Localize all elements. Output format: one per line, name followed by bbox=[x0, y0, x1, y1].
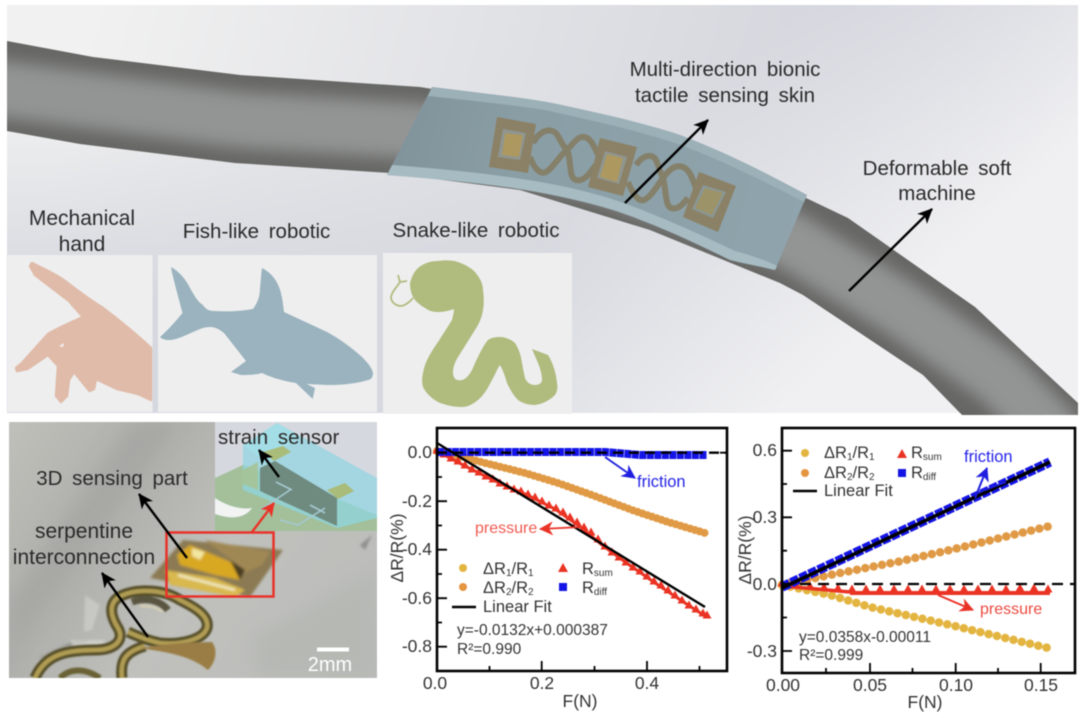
x axis title: F(N) bbox=[908, 692, 942, 712]
linear fit bbox=[782, 462, 1050, 588]
fit equation: y=0.0358x-0.00011 bbox=[799, 629, 931, 646]
arrow: pressure bbox=[938, 595, 973, 610]
annotation: friction: friction bbox=[637, 473, 686, 491]
linear fit bbox=[437, 443, 705, 607]
x tick labels: 0.15 bbox=[1024, 675, 1058, 695]
panel: fish silhouette bbox=[158, 255, 377, 412]
series: R diff squares bbox=[782, 462, 1050, 587]
legend: 2 bbox=[528, 587, 534, 598]
arrow: friction bbox=[605, 457, 635, 478]
arrow: friction bbox=[975, 468, 1006, 498]
label: 3D sensing part: 3D sensing part bbox=[36, 467, 188, 490]
inset: strain sensor CAD bbox=[215, 422, 377, 531]
label: serpentine interconnection: interconnection bbox=[13, 546, 155, 569]
3D sensing chip bbox=[150, 540, 283, 597]
series: delta R1 bbox=[782, 585, 1048, 648]
arrow: pressure bbox=[540, 527, 582, 529]
legend: R bbox=[582, 579, 594, 597]
legend: Linear Fit bbox=[824, 482, 893, 500]
x tick labels: 0.0 bbox=[423, 673, 447, 693]
legend: R bbox=[582, 560, 594, 578]
legend: ΔR bbox=[824, 444, 847, 462]
legend: 2 bbox=[506, 587, 512, 598]
serpentine interconnect in photo bbox=[35, 591, 207, 678]
legend: diff bbox=[594, 587, 607, 598]
panel: device photo bbox=[9, 422, 377, 678]
arrow: 3D sensing part bbox=[139, 494, 187, 558]
label: strain sensor: strain sensor bbox=[218, 426, 340, 449]
legend: 1 bbox=[528, 568, 534, 579]
y tick labels bbox=[402, 442, 432, 656]
x tick labels: 0.00 bbox=[766, 675, 800, 695]
legend: ΔR bbox=[824, 464, 847, 482]
label: mechanical hand: Mechanical bbox=[29, 207, 135, 230]
legend: 2 bbox=[869, 472, 875, 483]
zero reference bbox=[437, 452, 727, 454]
scale bar bbox=[317, 648, 349, 652]
panel: soft machine 3D render bbox=[0, 5, 1080, 440]
label: snake-like robotic: Snake-like robotic bbox=[393, 219, 559, 242]
legend: sum bbox=[923, 452, 942, 463]
series: R diff squares bbox=[437, 452, 707, 455]
series: delta R1 and R2 bbox=[437, 451, 705, 533]
label: sensing skin: Multi-direction bionic bbox=[630, 58, 820, 81]
axes frame and ticks bbox=[437, 428, 727, 671]
legend: R bbox=[911, 464, 923, 482]
x tick labels: 0.4 bbox=[635, 673, 659, 693]
x tick labels: 0.10 bbox=[939, 675, 973, 695]
y tick labels: 0.6 bbox=[753, 440, 777, 460]
y tick labels: -0.2 bbox=[402, 491, 432, 511]
legend: /R bbox=[512, 579, 528, 597]
x tick labels: 0.05 bbox=[853, 675, 887, 695]
sensing skin sleeve bbox=[387, 87, 807, 270]
legend: /R bbox=[852, 464, 869, 482]
series: R sum triangles bbox=[437, 450, 707, 616]
sensor pad 1 bbox=[489, 117, 536, 173]
scale label: 2mm bbox=[308, 654, 352, 676]
y tick labels: -0.3 bbox=[747, 641, 777, 661]
zoom box bbox=[166, 532, 274, 596]
arrow: strain sensor bbox=[259, 450, 279, 477]
y axis title: ΔR/R(%) bbox=[387, 513, 407, 583]
gold bracket in photo bbox=[140, 642, 215, 670]
label: mechanical hand: hand bbox=[59, 233, 105, 256]
annotation: pressure: pressure bbox=[980, 601, 1042, 618]
label: soft machine: Deformable soft bbox=[863, 157, 1011, 180]
y tick labels: -0.8 bbox=[402, 636, 432, 656]
zero reference bbox=[782, 583, 1075, 585]
series: delta R2 bbox=[782, 526, 1050, 585]
annotation: pressure: pressure bbox=[475, 520, 537, 537]
y tick labels bbox=[747, 440, 777, 661]
legend: /R bbox=[852, 444, 869, 462]
legend: 2 bbox=[847, 472, 853, 483]
soft machine tube bbox=[0, 30, 1080, 440]
arrow: serpentine bbox=[102, 573, 148, 637]
legend bbox=[452, 560, 613, 616]
chart: force response, pressure bbox=[387, 428, 727, 711]
y tick labels: 0.0 bbox=[408, 442, 432, 462]
x tick labels bbox=[766, 675, 1058, 695]
x axis title: F(N) bbox=[563, 691, 597, 711]
legend: 1 bbox=[506, 568, 512, 579]
legend: 1 bbox=[847, 452, 853, 463]
legend: /R bbox=[512, 560, 528, 578]
label: soft machine: machine bbox=[898, 182, 976, 205]
sensor pad 3 bbox=[683, 172, 736, 232]
arrow: skin label pointer bbox=[625, 120, 708, 203]
fit equation: R²=0.999 bbox=[799, 647, 863, 664]
panel: snake silhouette bbox=[383, 253, 572, 414]
x tick labels bbox=[423, 673, 659, 693]
legend: sum bbox=[594, 568, 613, 579]
legend: ΔR bbox=[483, 560, 506, 578]
label: serpentine interconnection: serpentine bbox=[35, 520, 133, 543]
fit equation: y=-0.0132x+0.000387 bbox=[457, 622, 608, 639]
panel: hand silhouette bbox=[8, 255, 152, 412]
x tick labels: 0.2 bbox=[530, 673, 554, 693]
arrow: soft machine pointer bbox=[849, 209, 932, 291]
y tick labels: -0.6 bbox=[402, 588, 432, 608]
legend: 1 bbox=[869, 452, 875, 463]
y tick labels: 0.3 bbox=[753, 507, 777, 527]
axes frame and ticks bbox=[782, 428, 1075, 673]
photo shading bbox=[20, 433, 146, 604]
background cutouts in photo bbox=[38, 535, 372, 658]
y tick labels: 0.0 bbox=[753, 574, 777, 594]
legend: ΔR bbox=[483, 579, 506, 597]
legend: Linear Fit bbox=[483, 598, 552, 616]
legend: R bbox=[911, 444, 923, 462]
label: sensing skin: tactile sensing skin bbox=[635, 84, 815, 107]
serpentine traces bbox=[530, 130, 696, 208]
y tick labels: -0.4 bbox=[402, 539, 432, 559]
chart: force response, friction bbox=[735, 428, 1075, 712]
annotation: friction: friction bbox=[964, 448, 1013, 466]
arrow: to inset bbox=[252, 503, 274, 532]
legend: diff bbox=[923, 472, 936, 483]
label: fish-like robotic: Fish-like robotic bbox=[183, 220, 330, 243]
series: R sum bbox=[782, 583, 1050, 593]
fit equation: R²=0.990 bbox=[457, 641, 522, 658]
y axis title: ΔR/R(%) bbox=[735, 515, 755, 585]
legend bbox=[793, 444, 942, 500]
sensor pad 2 bbox=[588, 138, 637, 196]
